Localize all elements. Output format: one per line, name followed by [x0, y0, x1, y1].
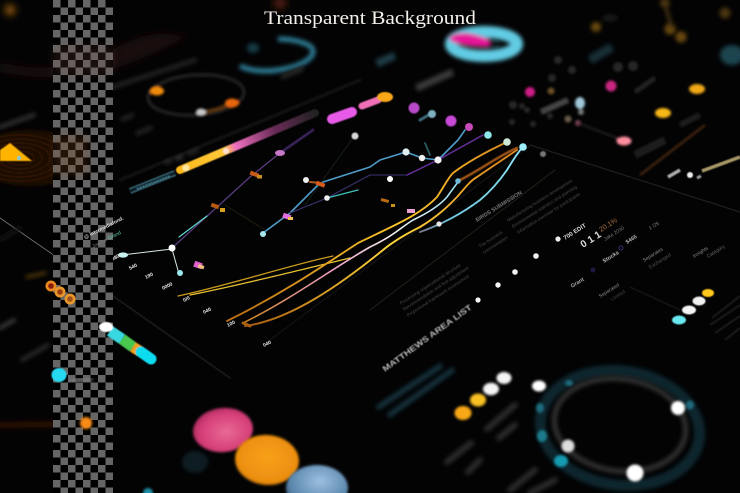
- chart axis labels: 0000: [161, 281, 174, 292]
- chart title label: @ intermediafond.: [83, 215, 125, 241]
- description text blocks: commentaries: [482, 235, 509, 255]
- dot row legend: [475, 253, 539, 303]
- large ring gauge: [532, 360, 707, 493]
- description text blocks: Environmental statistics and planning: [511, 184, 578, 229]
- flat yellow lines: [178, 256, 350, 296]
- chart axis labels: 040: [202, 307, 213, 316]
- description text blocks: [399, 178, 582, 318]
- title: Transparent Background: [264, 8, 477, 29]
- stats block: Jake 2030: [603, 225, 626, 243]
- stats block: Exchanged: [648, 252, 672, 271]
- description text blocks: Manufacturing business development: [506, 178, 574, 223]
- donut chart: cyan and magenta: [449, 32, 517, 56]
- gradient status bar: [99, 322, 151, 359]
- stats block: 1 /25: [648, 221, 661, 232]
- stats block: 20.1%: [598, 217, 619, 234]
- right legend dots: [630, 287, 740, 340]
- stats block: 0 1 1: [579, 229, 604, 251]
- stats block: Grant: [570, 277, 586, 290]
- right edge legend bar: [668, 157, 740, 178]
- large pink sphere: [191, 405, 255, 455]
- chart axis labels: 540: [128, 263, 139, 272]
- description text blocks: Processing organizational structure: [399, 262, 462, 306]
- chart axis labels: 100: [226, 320, 237, 329]
- stats block: $466: [625, 234, 638, 246]
- small background labels: [120, 52, 454, 165]
- stats block: Separated: [598, 282, 621, 300]
- blurred node network: [509, 56, 705, 175]
- concentric radar with yellow triangle: [0, 130, 88, 186]
- blurred labels by dots: [447, 405, 555, 493]
- stats block: Limited: [610, 289, 627, 303]
- teal blurred sub-block: [377, 365, 454, 416]
- top progress bar with pink and yellow segments: [180, 92, 393, 172]
- stats block: Separates: [642, 246, 665, 264]
- dark sphere: [182, 451, 208, 473]
- main curve lines: orange, white, yellow, cyan: [227, 142, 523, 326]
- ring chart: teal arc: [240, 39, 313, 71]
- chart axis labels: [108, 253, 273, 349]
- teal label box: [130, 173, 175, 191]
- description text blocks: BIRDS SUBMISSION: [475, 190, 523, 224]
- line chart markers: [118, 102, 546, 276]
- description text blocks: Proportional framework assessment: [406, 273, 471, 318]
- description text blocks: The business: [478, 229, 504, 249]
- chart title label: Journal Grand: [91, 230, 122, 250]
- description text blocks: Recommendation and fine adjustment: [402, 265, 470, 312]
- blurred background wave and orange glow: [0, 0, 286, 77]
- chart axis labels: 190: [144, 272, 155, 281]
- ring chart: orange dots: [147, 72, 245, 118]
- elements crossing the checkerboard: [46, 280, 92, 429]
- stats block: Category: [706, 244, 727, 260]
- multi-series line chart: upper lines: [122, 113, 483, 274]
- large blue sphere: [286, 465, 348, 493]
- yellow and white status dots: [454, 372, 512, 420]
- chart axis labels: 0/0: [182, 295, 191, 304]
- chart axis labels: 040: [262, 340, 273, 349]
- checkerboard transparency strip: [53, 0, 113, 493]
- left panel: blurred labels: [0, 228, 78, 425]
- stats block: 700 EDIT: [563, 223, 588, 242]
- large orange sphere: [233, 432, 301, 488]
- blurred upper right cluster: [590, 0, 740, 65]
- stats block: Stocks: [602, 250, 620, 265]
- list heading: MATTHEWS AREA LIST: [381, 303, 474, 374]
- chart axis labels: 1380: [108, 253, 121, 264]
- panel dividers: [0, 60, 740, 378]
- small cyan dot bottom: [143, 488, 153, 493]
- stats block: Insights: [692, 245, 710, 260]
- description text blocks: Information overview for participants: [516, 191, 582, 235]
- stats block: [555, 217, 727, 303]
